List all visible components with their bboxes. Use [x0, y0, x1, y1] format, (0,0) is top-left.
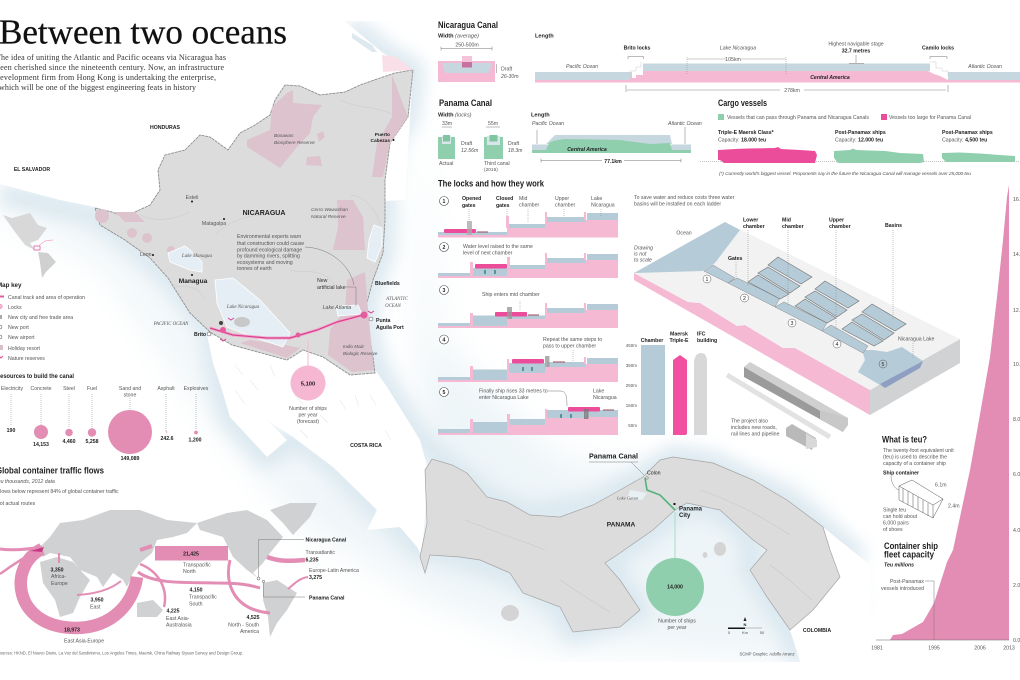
canal length profile [535, 42, 1020, 94]
panama map labels: Lake Gatun [616, 496, 639, 500]
resources to build the canal: 190 [7, 428, 15, 434]
step 5 [438, 388, 618, 435]
resources to build the canal: 1,200 [189, 438, 202, 444]
flow labels: America [240, 629, 259, 635]
height comparison chart: Maersk [670, 332, 688, 338]
what is teu: 6,000 pairs [883, 520, 909, 526]
intro text: been cherished since the nineteenth century. Now, an infrastructure [0, 63, 224, 72]
map labels: Cerro Wawashan [311, 207, 348, 213]
step 2: Water level raised to the same [463, 244, 533, 250]
flow labels: Africa- [51, 574, 66, 580]
panel: cargo vessels: Post-Panamax ships [942, 130, 993, 136]
flow labels: North [183, 569, 196, 575]
height comparison chart [626, 332, 717, 435]
height comparison chart: 250m [626, 383, 637, 388]
panama ships bubble: per year [667, 625, 687, 631]
scale bar: 0 [728, 630, 731, 635]
flow labels: Australasia [166, 622, 192, 628]
isometric lock diagram: Gates [728, 256, 743, 262]
flow labels: Europe [51, 581, 68, 587]
canal length profile: Atlantic Ocean [967, 64, 1002, 70]
canal length profile: 32.7 metres [842, 48, 870, 54]
title: Between two oceans [0, 14, 287, 52]
step 1: Opened [462, 196, 481, 202]
map key: Holiday resort [8, 346, 41, 352]
lakes [168, 225, 382, 347]
panel: cargo vessels [700, 98, 1020, 177]
flow labels: East [90, 604, 101, 610]
what is teu: can hold about [883, 514, 918, 520]
map labels: Biosphere Reserve [274, 140, 315, 146]
map labels: ATLANTIC [385, 297, 409, 302]
panel: Nicaragua Canal: Length [535, 34, 554, 40]
flow labels: South [189, 602, 203, 608]
step 3: 3 [443, 288, 446, 294]
panel: Panama Canal: Length [531, 112, 550, 118]
isometric lock diagram: to scale [634, 258, 652, 264]
map labels: Matagalpa [202, 221, 226, 227]
environmental note callout [237, 234, 356, 306]
panama map labels: PANAMA [607, 522, 635, 528]
map key: Canal track and area of operation [8, 295, 85, 301]
panel: cargo vessels: Capacity: 18.000 teu [718, 138, 766, 144]
infrastructure: rail and pipeline [727, 362, 848, 450]
panama map labels: Panama [679, 506, 703, 512]
what is teu: Single teu [883, 508, 906, 514]
map labels: NICARAGUA [243, 210, 285, 217]
step 3: Ship enters mid chamber [482, 292, 540, 298]
resources to build the canal: Asphalt [157, 386, 175, 392]
intro text: development firm from Hong Kong is undertaking the enterprise, [0, 73, 216, 82]
panel: Nicaragua Canal [438, 20, 1020, 94]
map labels: HONDURAS [150, 125, 181, 131]
ships per year forecast bubble: per year [298, 412, 318, 418]
panel: cargo vessels: Capacity: 4,500 teu [942, 138, 987, 144]
panel: cargo vessels: Capacity: 12.000 teu [835, 138, 883, 144]
isometric lock diagram: chamber [743, 224, 765, 230]
Panama canal track [645, 478, 675, 510]
map key: New airport [8, 335, 35, 341]
flow labels: East Asia- [166, 616, 190, 622]
panama ships bubble [646, 512, 704, 631]
flow labels: 3,950 [91, 598, 104, 604]
fleet capacity area chart [871, 185, 1020, 652]
step 1: Lake [591, 196, 602, 202]
lock numbers: 3 [791, 321, 794, 327]
intro text: which will be one of the biggest engineering feats in history [0, 83, 196, 92]
flow labels: 4,225 [167, 608, 180, 614]
step 1: chamber [555, 202, 575, 208]
infrastructure: rail and pipeline: The project also [731, 418, 768, 424]
scale bar: 50 [760, 630, 765, 635]
panel: Panama Canal: Width (locks) [438, 112, 472, 118]
lock sections: Third canal [484, 161, 510, 167]
resources to build the canal: Electricity [1, 386, 23, 392]
height comparison chart: Triple-E [669, 338, 689, 344]
isometric lock diagram: Mid [782, 218, 791, 224]
panel: Panama Canal: Atlantic Ocean [667, 121, 702, 127]
global container traffic heading: Flows below represent 84% of global container traffic [0, 489, 119, 495]
canal length profile: Central America [810, 75, 850, 81]
inset locator map [3, 213, 56, 278]
world map [40, 503, 317, 637]
panel: the locks and how they work: The locks and how they work [438, 178, 545, 188]
scale bar [728, 617, 765, 635]
what is teu: Container ship [884, 541, 938, 551]
step 5: 5 [443, 390, 446, 396]
map key: Nature reserves [8, 356, 45, 362]
lock numbers: 5 [882, 362, 885, 368]
panel: cargo vessels: Vessels too large for Panama Canal [889, 115, 971, 121]
flow labels: Nicaragua Canal [306, 538, 347, 544]
panama ships bubble: Number of ships [658, 618, 696, 624]
step 2: level of next chamber [463, 250, 513, 256]
isometric lock diagram: Lower [743, 218, 758, 224]
map labels: Lake Nicaragua [226, 305, 260, 310]
panel: Panama Canal: 55m [488, 121, 498, 127]
land texture [140, 100, 400, 300]
resources to build the canal: 149,089 [121, 456, 139, 462]
lock sections [438, 135, 523, 173]
nature reserves [95, 75, 408, 372]
flow junction dark [30, 547, 44, 552]
resources to build the canal: Steel [63, 386, 75, 392]
step 4 [438, 335, 618, 382]
map labels: Aguila Port [376, 325, 404, 331]
map labels: Bluefields [375, 281, 400, 287]
resources to build the canal: 5,258 [86, 439, 99, 445]
canal width section: Draft [501, 66, 513, 72]
intro text [0, 53, 226, 92]
step 1: chamber [519, 202, 539, 208]
canal length profile: Highest navigable stage [828, 42, 884, 48]
panel: Nicaragua Canal: Width (average) [438, 34, 479, 40]
flow labels: 4,525 [247, 615, 260, 621]
flow labels: 21,425 [183, 552, 199, 558]
step 1 [438, 196, 618, 238]
truck [786, 424, 817, 450]
isometric lock diagram: Ocean [676, 230, 692, 236]
flow labels: 6,235 [306, 558, 319, 564]
what is teu: Teu millions [884, 562, 914, 568]
resources to build the canal: Sand and [119, 386, 141, 392]
map labels: Lake Atlanta [323, 305, 351, 311]
environmental note callout: New [317, 278, 328, 284]
scale bar: N [744, 622, 747, 627]
chambers [704, 265, 868, 353]
isometric lock diagram: Drawing [634, 246, 653, 252]
step 1: gates [462, 203, 476, 209]
map labels: Esteli [186, 195, 198, 201]
lock sections: Draft [461, 141, 473, 147]
flow labels: 18,973 [64, 628, 80, 634]
panama map labels: COLOMBIA [803, 628, 831, 634]
flow labels: 3,275 [309, 575, 322, 581]
resources to build the canal: stone [124, 392, 136, 398]
lock sections: 18.3m [508, 148, 523, 154]
map labels: Indio Maiz [343, 344, 365, 349]
panel: Panama Canal: 33m [442, 121, 452, 127]
canal length profile: Lake Nicaragua [720, 46, 756, 52]
flow labels: 3,350 [51, 568, 64, 574]
map key: New port [8, 325, 29, 331]
panama map labels: SCMP Graphic: Adolfo Arranz [739, 652, 795, 656]
panama map labels: Panama Canal [589, 452, 638, 460]
step 4: pass to upper chamber [543, 344, 596, 350]
panel: Panama Canal [438, 98, 702, 173]
ships per year forecast bubble: 5,100 [301, 382, 315, 388]
what is teu: Ship container [883, 470, 919, 476]
map labels: Natural Reserve [311, 214, 346, 220]
lock numbers: 1 [706, 277, 709, 283]
map labels [14, 125, 409, 449]
map labels: OCEAN [385, 304, 402, 309]
map labels: Bosawas [274, 133, 294, 139]
environmental note callout: profound ecological damage [237, 248, 302, 254]
container flows [0, 546, 308, 628]
lock numbers [703, 275, 887, 368]
step 4: 4 [443, 338, 446, 344]
resources to build the canal: Explosives [184, 386, 209, 392]
map labels: Punta [376, 318, 391, 324]
resources to build the canal [0, 373, 209, 462]
ships per year forecast bubble [289, 340, 327, 425]
intro text: The idea of uniting the Atlantic and Pacific oceans via Nicaragua has [0, 53, 226, 62]
step 5: enter Nicaragua Lake [479, 395, 529, 401]
flow labels: East Asia-Europe [64, 638, 104, 644]
resources to build the canal: Fuel [87, 386, 97, 392]
canal length profile: Camilo locks [922, 46, 954, 52]
panama ships bubble: 14,000 [667, 584, 683, 590]
flow labels: North - South [228, 622, 259, 628]
height comparison chart: IFC [697, 332, 706, 338]
Nicaragua land [95, 55, 413, 375]
lock sections: Draft [508, 141, 520, 147]
height comparison chart: 350m [626, 363, 637, 368]
panel: cargo vessels: (*) Currently world's biggest vessel. Proponents say in the future the Nicaragua Canal will manage vessels over 25,000 teu [719, 171, 971, 177]
global container traffic heading [0, 466, 119, 507]
height comparison chart: Chamber [641, 338, 663, 344]
canal width section: 26-30m [500, 74, 519, 80]
canal length profile: Pacific Ocean [566, 64, 598, 70]
resources to build the canal: Concrete [30, 386, 52, 392]
fleet capacity area chart: 1981 [871, 646, 883, 652]
panama map labels: City [679, 513, 691, 519]
what is teu: What is teu? [882, 434, 927, 444]
step 3 [438, 286, 618, 328]
infrastructure: rail and pipeline: rail lines and pipeline [731, 432, 780, 438]
height comparison chart: 450m [626, 343, 637, 348]
map labels: Cabezas [371, 138, 390, 144]
infrastructure: rail and pipeline: includes new roads, [731, 425, 777, 431]
map labels: Biologic Reserve [343, 351, 378, 356]
map labels: Lake Managua [181, 254, 213, 259]
environmental note callout: by damming rivers, splitting [237, 254, 300, 260]
container icon [899, 480, 943, 518]
flow labels: 4,150 [190, 588, 203, 594]
panama length profile: 77.1km [604, 159, 622, 165]
step 1: Closed [496, 196, 513, 202]
sources: Sources: HKND, El Nuevo Diario, La Voz del Sandinismo, Los Angeles Times, Maersk, China Railway Siyuan Survey and Design Group. [0, 650, 243, 656]
step 1: gates [496, 203, 510, 209]
what is teu: 6.1m [935, 482, 947, 488]
height comparison chart: building [697, 338, 717, 344]
map labels: Managua [179, 278, 208, 285]
what is teu [882, 434, 960, 568]
Panama land [420, 457, 840, 632]
basins [748, 257, 812, 299]
ships per year forecast bubble: (forecast) [297, 419, 319, 425]
ocean [634, 222, 740, 273]
step 2 [438, 242, 618, 278]
flow labels: Panama Canal [309, 596, 345, 602]
what is teu: fleet capacity [884, 550, 935, 560]
resources to build the canal: 242.6 [161, 436, 174, 442]
isometric lock diagram: is not [634, 252, 647, 258]
map labels: Brito [194, 332, 206, 338]
step 1: Upper [555, 196, 569, 202]
isometric lock diagram: Upper [829, 218, 844, 224]
panel: cargo vessels: Cargo vessels [718, 98, 767, 108]
height comparison chart: 50m [628, 423, 637, 428]
canal length profile: 105km [725, 57, 741, 63]
isometric lock diagram [634, 195, 960, 415]
flow labels [51, 538, 359, 644]
step 2: 2 [443, 245, 446, 251]
map key: New city and free trade area [8, 315, 73, 321]
step 1: 1 [443, 199, 446, 205]
height comparison chart: 150m [626, 403, 637, 408]
resources to build the canal: 4,460 [63, 439, 76, 445]
panel: Nicaragua Canal: 250-500m [455, 42, 479, 48]
panel: Panama Canal: Pacific Ocean [532, 121, 564, 127]
what is teu: of shoes [883, 527, 903, 533]
step 5: Nicaragua [593, 395, 617, 401]
flow labels: Transatlantic [306, 550, 335, 556]
environmental note callout: tonnes of earth [237, 266, 272, 272]
flow labels: Europe-Latin America [309, 568, 359, 574]
panel: Nicaragua Canal: Nicaragua Canal [438, 20, 498, 30]
environmental note callout: artificial lake [317, 285, 346, 291]
panama length profile [532, 127, 691, 165]
canal width section [438, 56, 519, 82]
panama map labels: Colon [647, 470, 661, 476]
step 1: Mid [519, 196, 527, 202]
what is teu: The twenty-foot equivalent unit [883, 448, 954, 454]
costa rica texture [235, 365, 391, 440]
isometric lock diagram: chamber [829, 224, 851, 230]
isometric lock diagram: Basins [885, 223, 902, 229]
honduras coast island [352, 33, 377, 52]
flow labels: Transpacific [189, 594, 217, 600]
Panama texture [465, 490, 812, 612]
fleet capacity area chart: 1995 [928, 646, 940, 652]
lock sections: 12.56m [461, 148, 479, 154]
environmental note callout: that construction could cause [237, 241, 304, 247]
environmental note callout: Environmental experts warn [237, 234, 301, 240]
ship silhouettes [718, 147, 1015, 163]
environmental note callout: ecosystems and moving [237, 260, 293, 266]
ships per year forecast bubble: Number of ships [289, 406, 327, 412]
nicaragua lake [858, 347, 923, 388]
panama map labels [589, 452, 831, 656]
fleet capacity area chart: Post-Panamax [890, 579, 924, 585]
map labels: Leon [140, 252, 152, 258]
panama length profile: Central America [567, 147, 607, 153]
lock numbers: 2 [743, 296, 746, 302]
lock sections: Actual [439, 161, 453, 167]
Panama lake Gatun [627, 490, 647, 500]
what is teu: (teu) is used to describe the [883, 454, 947, 460]
map labels: PACIFIC OCEAN [153, 322, 189, 327]
islands [501, 542, 726, 621]
panel: the locks and how they work [438, 178, 618, 435]
scale bar: Km [742, 630, 749, 635]
what is teu: 2.4m [948, 504, 960, 510]
step 5: Lake [593, 388, 604, 394]
what is teu: capacity of a container ship [883, 461, 946, 467]
step 4: Repeat the same steps to [543, 337, 602, 343]
panel: cargo vessels: Post-Panamax ships [835, 130, 886, 136]
fleet capacity area chart: 2013 [1003, 646, 1015, 652]
resources to build the canal: 14,153 [33, 442, 49, 448]
canal length profile: 278km [784, 88, 800, 94]
lock numbers: 4 [836, 342, 839, 348]
map key [0, 282, 85, 362]
isometric lock diagram: Nicaragua Lake [898, 336, 934, 342]
fleet capacity area chart: vessels introduced [881, 586, 924, 592]
panel: Panama Canal: Panama Canal [439, 98, 492, 108]
canal track [210, 311, 374, 341]
canal length profile: Brito locks [624, 46, 651, 52]
isometric lock diagram: To save water and reduce costs three water [634, 195, 735, 201]
map labels: EL SALVADOR [14, 167, 50, 173]
lock sections: (2016) [484, 167, 498, 173]
isometric lock diagram: chamber [782, 224, 804, 230]
map key: Locks [8, 305, 22, 311]
flow labels: Transpacific [183, 562, 211, 568]
map labels: COSTA RICA [350, 443, 382, 449]
step 1: Nicaragua [591, 202, 615, 208]
step 5: Finally ship rises 33 metres to [479, 388, 548, 394]
isometric lock diagram: basins will be installed on each ladder [634, 202, 721, 208]
panel: cargo vessels: Vessels that can pass through Panama and Nicaragua Canals [727, 115, 869, 121]
map labels: Puerto [375, 132, 390, 138]
fleet capacity area chart: 2006 [974, 646, 986, 652]
block faces [634, 222, 960, 415]
panel: cargo vessels: Triple-E Maersk Class* [718, 130, 775, 136]
